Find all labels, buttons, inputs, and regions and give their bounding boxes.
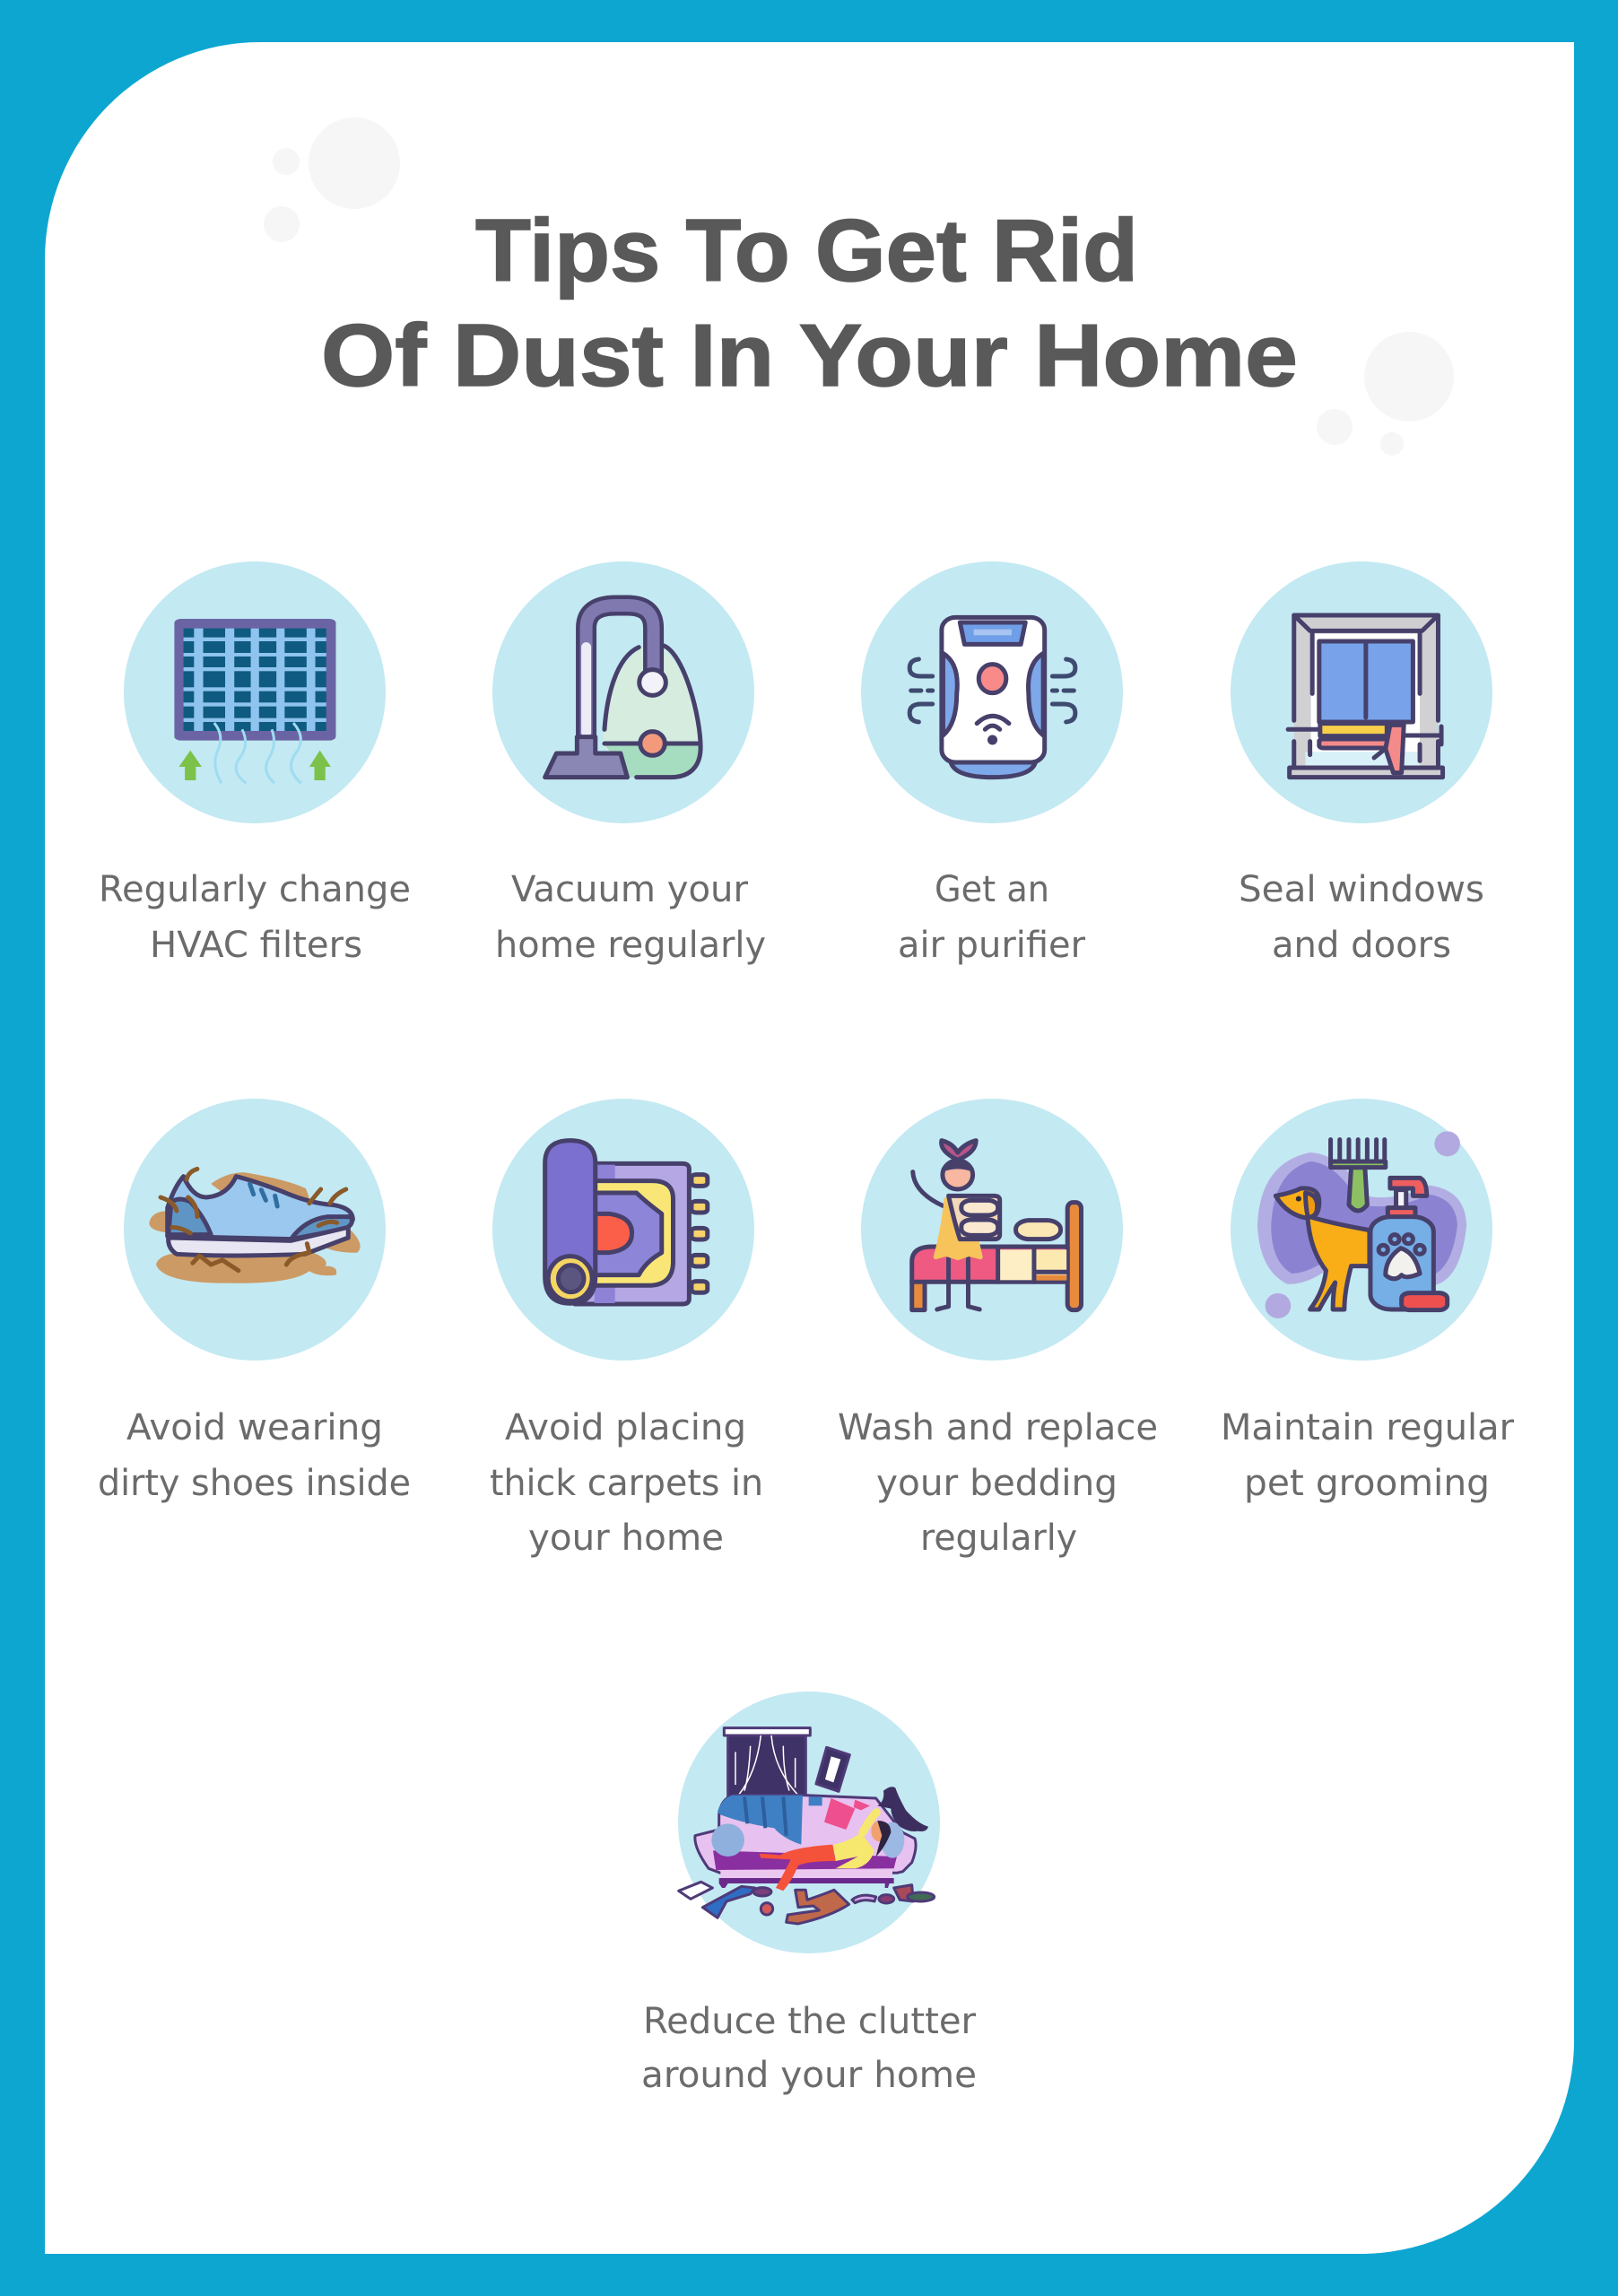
title: Of Dust In Your Home (321, 306, 1298, 404)
label: and doors (1272, 925, 1451, 966)
icon: muddy shoe (149, 1169, 361, 1283)
label: air purifier (898, 925, 1086, 966)
label (838, 1407, 1158, 1559)
label (99, 869, 411, 966)
icon circle (124, 561, 386, 823)
icon: HVAC filter (174, 619, 335, 783)
label: Reduce the clutter (643, 2001, 977, 2042)
icon circle (492, 561, 754, 823)
icon circle (861, 561, 1123, 823)
tip: thick carpets (490, 1099, 763, 1559)
decorative dust puffs top right (1317, 332, 1454, 456)
label: Get an (935, 869, 1049, 910)
icon circle (1231, 561, 1492, 823)
label: Regularly change (99, 869, 411, 910)
tip: dirty shoes (98, 1099, 411, 1504)
label (98, 1407, 411, 1504)
icon circle (124, 1099, 386, 1361)
label: thick carpets in (490, 1463, 763, 1504)
tip: wash bedding (838, 1099, 1158, 1559)
icon: rolled carpet (545, 1141, 708, 1304)
label: your home (528, 1518, 724, 1559)
title (321, 201, 1298, 404)
label (490, 1407, 763, 1559)
label (898, 869, 1086, 966)
icon circle (492, 1099, 754, 1361)
title: Tips To Get Rid (475, 201, 1138, 300)
tip: reduce clutter (641, 1692, 977, 2096)
tip: air purifier (861, 561, 1123, 966)
label: Avoid placing (505, 1407, 746, 1448)
tip: seal windows (1231, 561, 1492, 966)
tip: HVAC filters (99, 561, 411, 966)
icon circle (1231, 1099, 1492, 1361)
tip: pet grooming (1221, 1099, 1515, 1504)
icon circle (861, 1099, 1123, 1361)
label: Avoid wearing (126, 1407, 383, 1448)
icon: person making a bed (912, 1141, 1082, 1310)
label (1239, 869, 1484, 966)
icon: air purifier (909, 617, 1075, 778)
icon: vacuum cleaner (545, 605, 700, 778)
label: Wash and replace (838, 1407, 1158, 1448)
label: Seal windows (1239, 869, 1484, 910)
label: HVAC filters (150, 925, 362, 966)
tip: vacuum (492, 561, 766, 966)
icon: cluttered couch scene (679, 1728, 935, 1924)
label (641, 2001, 977, 2096)
icon: window and caulking gun (1288, 615, 1443, 778)
icon circle (678, 1692, 940, 1953)
label: Vacuum your (511, 869, 749, 910)
label: around your home (641, 2055, 977, 2096)
label: Maintain regular (1221, 1407, 1515, 1448)
label: home regularly (495, 925, 766, 966)
icon: dog, comb and shampoo (1257, 1131, 1466, 1318)
label (495, 869, 766, 966)
label: regularly (920, 1518, 1077, 1559)
label: your bedding (876, 1463, 1118, 1504)
decorative dust puffs top left (264, 117, 400, 242)
label: pet grooming (1244, 1463, 1490, 1504)
label (1221, 1407, 1515, 1504)
label: dirty shoes inside (98, 1463, 411, 1504)
